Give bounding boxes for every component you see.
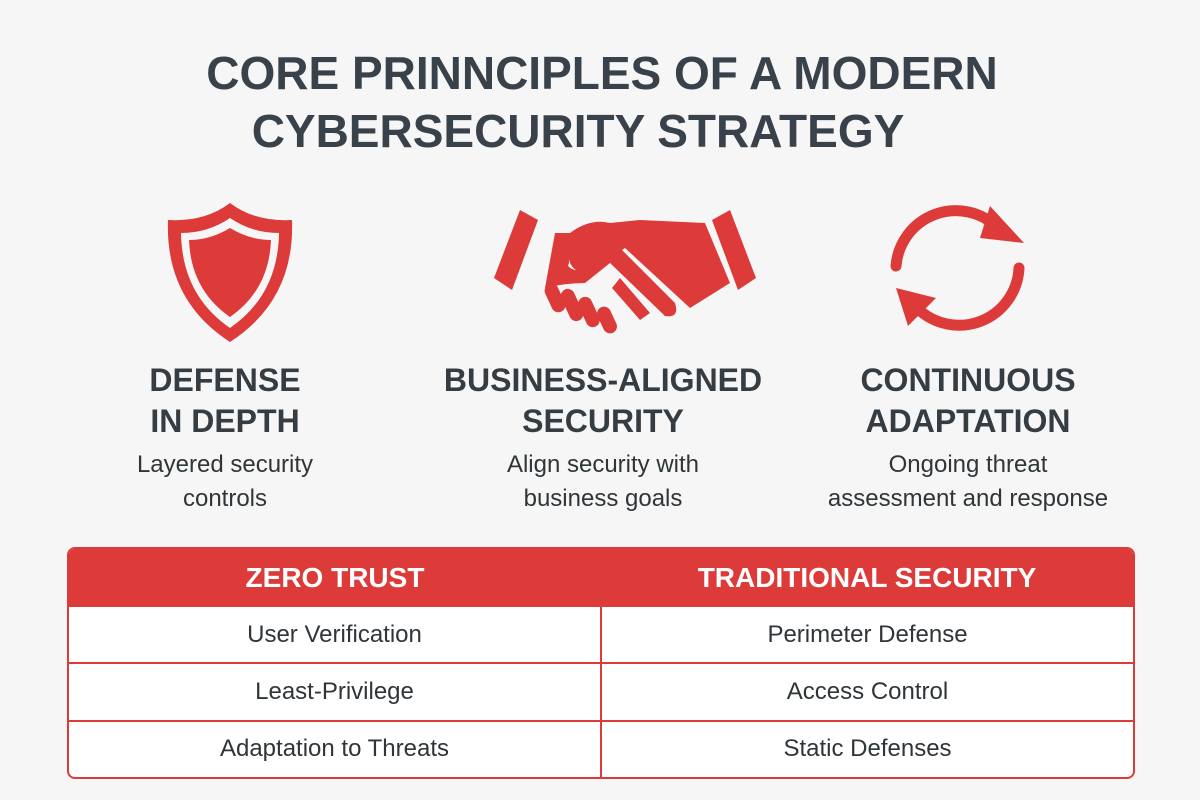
principle: defense in depth bbox=[137, 362, 313, 512]
icon: handshake bbox=[494, 210, 756, 334]
comparison table: Adaptation to Threats bbox=[220, 735, 449, 762]
comparison table: ZERO TRUST bbox=[246, 562, 424, 593]
title bbox=[206, 47, 998, 157]
principle: business-aligned security bbox=[444, 362, 762, 512]
principle: continuous adaptation: ADAPTATION bbox=[865, 403, 1070, 439]
comparison table: Least-Privilege bbox=[255, 678, 414, 705]
comparison table: Access Control bbox=[787, 678, 948, 705]
principle: continuous adaptation: Ongoing threat bbox=[889, 451, 1047, 478]
principle: defense in depth: DEFENSE bbox=[149, 362, 301, 398]
principle: business-aligned security: BUSINESS-ALIGNED bbox=[444, 362, 762, 398]
principle: continuous adaptation: CONTINUOUS bbox=[860, 362, 1076, 398]
comparison table: TRADITIONAL SECURITY bbox=[698, 562, 1036, 593]
principle: continuous adaptation bbox=[828, 362, 1108, 512]
principle: business-aligned security: business goals bbox=[524, 485, 682, 512]
icon: shield bbox=[168, 203, 292, 342]
icon: cycle arrows bbox=[890, 205, 1024, 331]
principle: defense in depth: IN DEPTH bbox=[150, 403, 300, 439]
comparison table: Static Defenses bbox=[783, 735, 952, 762]
principle: continuous adaptation: assessment and response bbox=[828, 485, 1108, 512]
title: CYBERSECURITY STRATEGY bbox=[252, 105, 904, 157]
comparison table bbox=[67, 547, 1135, 779]
principle: business-aligned security: SECURITY bbox=[522, 403, 684, 439]
comparison table: User Verification bbox=[247, 621, 422, 648]
title: CORE PRINNCIPLES OF A MODERN bbox=[206, 47, 998, 99]
principle: defense in depth: Layered security bbox=[137, 451, 313, 478]
comparison table: Perimeter Defense bbox=[767, 621, 968, 648]
principle: business-aligned security: Align security with bbox=[507, 451, 699, 478]
principle: defense in depth: controls bbox=[183, 485, 267, 512]
